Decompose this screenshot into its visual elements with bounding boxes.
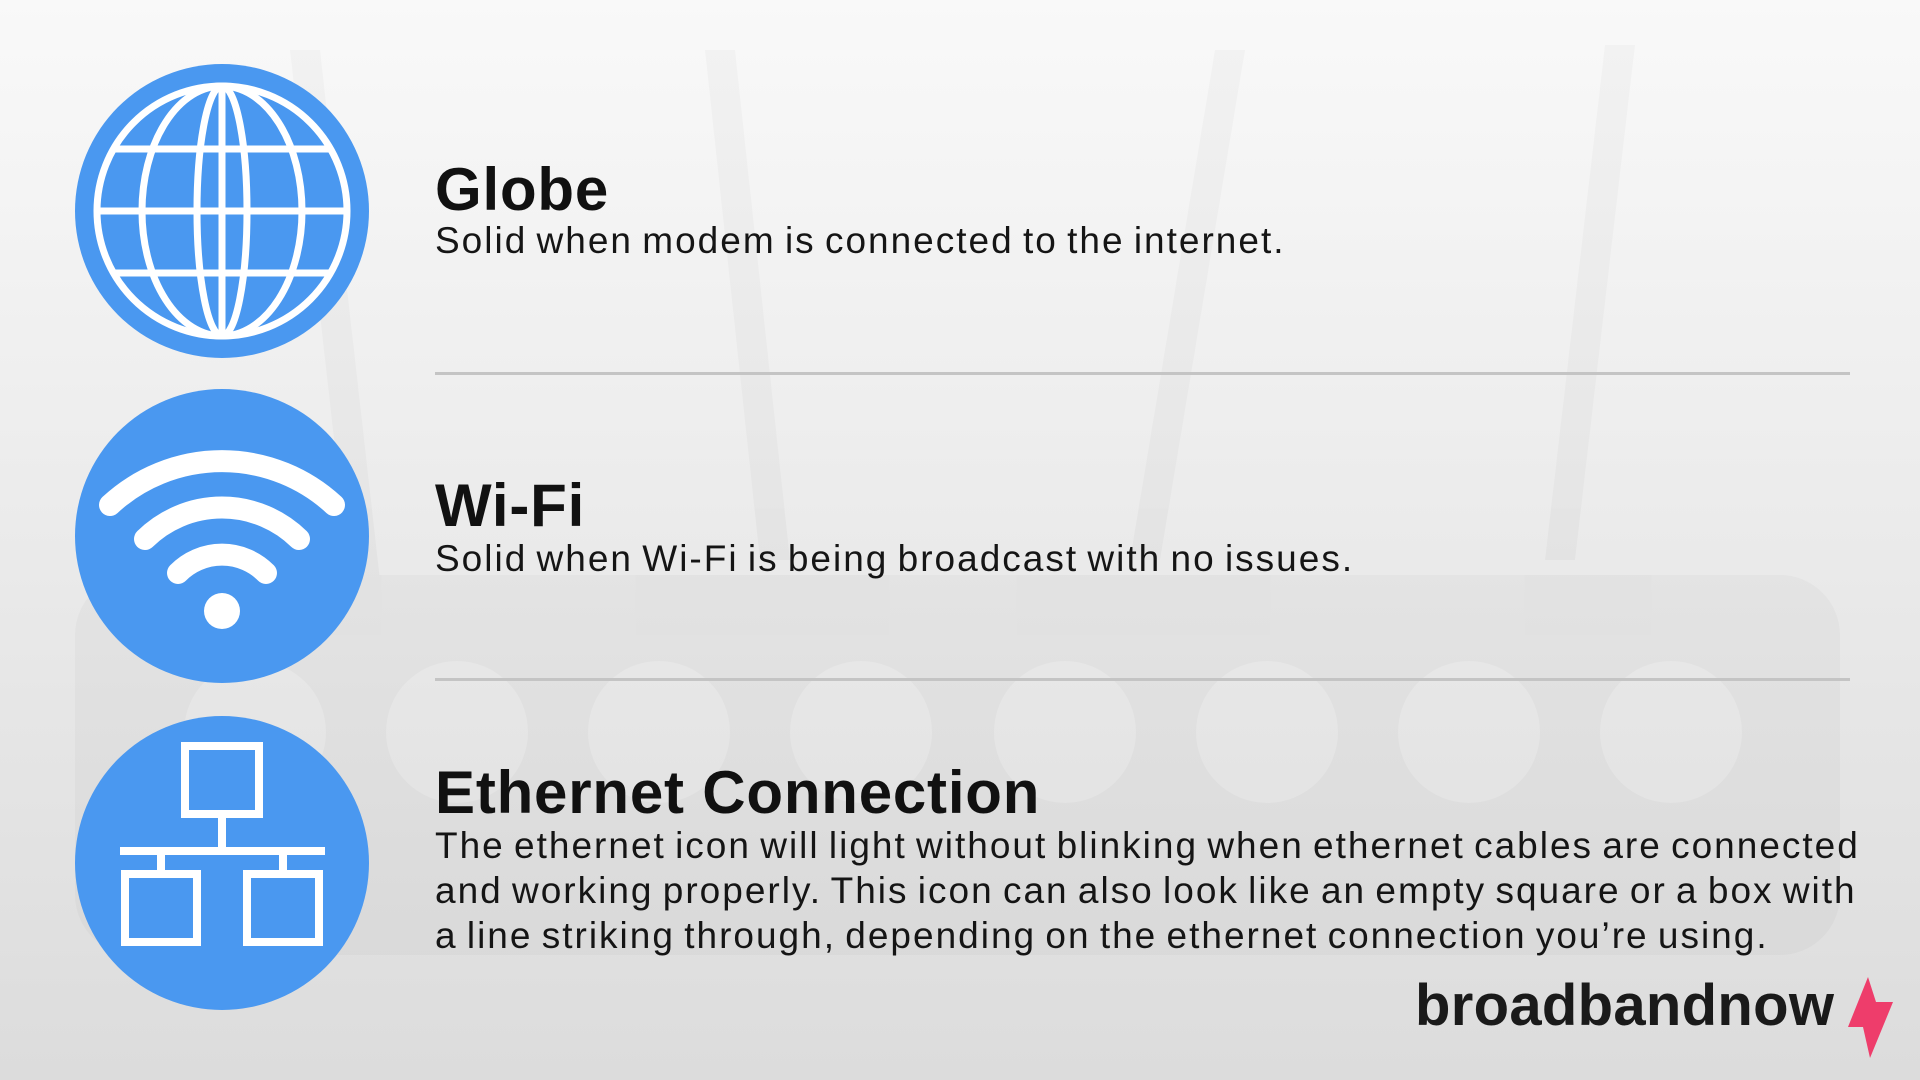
icon: lightning bolt xyxy=(1848,977,1893,1058)
logo: broadbandnow xyxy=(1415,973,1893,1058)
logo: broadbandnow: broadbandnow xyxy=(1415,973,1834,1038)
icon: globe xyxy=(75,64,369,358)
heading: Ethernet Connection: Ethernet Connection xyxy=(435,759,1040,826)
text: ethernet description: and working properly. This icon can also look like an empty square or a box with xyxy=(435,870,1857,911)
text: ethernet description: a line striking through, depending on the ethernet connection you’re using. xyxy=(435,915,1769,956)
heading: Globe: Globe xyxy=(435,156,609,223)
icon: wifi xyxy=(75,389,369,683)
text: wifi description: Solid when Wi-Fi is being broadcast with no issues. xyxy=(435,538,1354,579)
heading: Wi-Fi: Wi-Fi xyxy=(435,472,585,539)
icon: ethernet xyxy=(75,716,369,1010)
text: globe description: Solid when modem is connected to the internet. xyxy=(435,220,1286,261)
text: ethernet description: The ethernet icon will light without blinking when ethernet cables are connected xyxy=(435,825,1860,866)
text: ethernet description xyxy=(435,825,1860,956)
